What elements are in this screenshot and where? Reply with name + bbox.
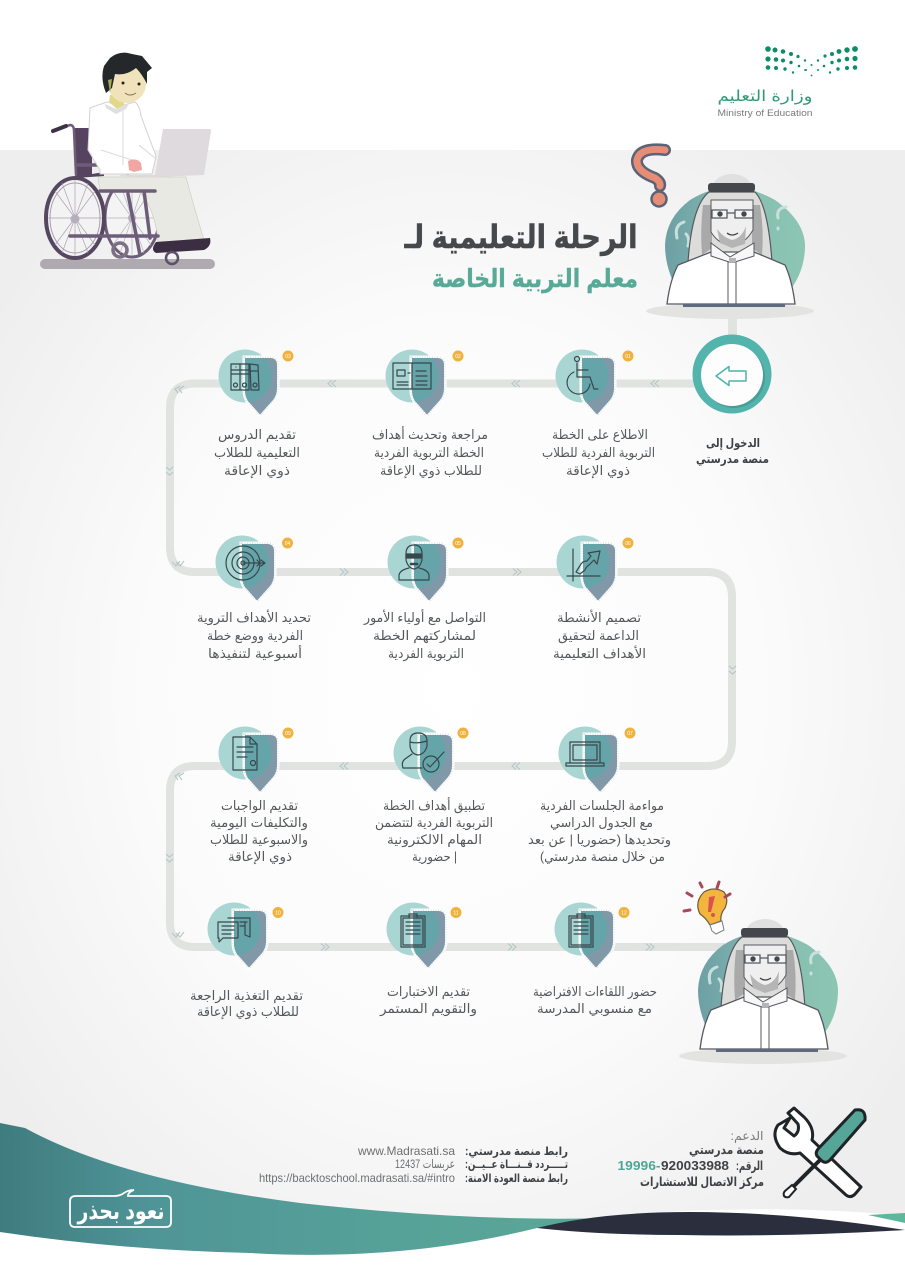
text 11: تقديم الاختبارات (387, 984, 470, 1000)
text 11: والتقويم المستمر (379, 1001, 477, 1017)
text 02: مراجعة وتحديث أهداف (372, 426, 488, 443)
text 04: الفردية ووضع خطة (207, 628, 303, 644)
marker and clipboard icon (554, 902, 613, 967)
text 12 (533, 984, 657, 1017)
badge 02: 02 (455, 354, 461, 360)
marker and person check icon (394, 726, 452, 791)
marker and chat icon (208, 902, 266, 967)
badge 10: 10 (275, 910, 281, 916)
link values: عربسات 12437 (395, 1157, 455, 1172)
step 09 (210, 726, 308, 865)
text 08: | حضورية (412, 849, 457, 865)
text 07: من خلال منصة مدرستي) (540, 849, 665, 865)
link labels: رابط منصة العودة الامنة: (465, 1173, 568, 1186)
step 10 (190, 902, 303, 1020)
marker and target icon (216, 536, 274, 600)
tools icon (775, 1108, 865, 1197)
phone number: 920033988 (661, 1159, 729, 1173)
badge 07 (624, 728, 636, 738)
illustration: teacher with question mark (637, 149, 814, 319)
text 06: الداعمة لتحقيق (558, 628, 639, 644)
link labels: تـــــردد قــنـــاة عــيــن: (465, 1159, 568, 1171)
wrench (775, 1108, 861, 1197)
marker and parent icon (388, 536, 446, 600)
platform name: منصة مدرستي (689, 1143, 764, 1157)
text 01: ذوي الإعاقة (566, 463, 630, 479)
support label: الدعم: (730, 1129, 764, 1143)
marker and book icon (386, 350, 444, 414)
text 01: الاطلاع على الخطة (552, 427, 648, 443)
marker and growth chart icon (556, 536, 615, 600)
text 09: تقديم الواجبات (221, 798, 298, 814)
marker and clipboard icon (386, 902, 445, 967)
text 02: الخطة التربوية الفردية (374, 445, 484, 461)
text 08: المهام الالكترونية (387, 832, 482, 848)
step 06 (553, 536, 646, 661)
logo dots (765, 46, 858, 76)
footer swoosh: teal wave (0, 1123, 610, 1255)
screwdriver (816, 1110, 865, 1162)
marker and wheelchair icon (556, 350, 614, 414)
timeline path (170, 384, 732, 947)
step 01 (542, 350, 655, 479)
light bulb (684, 882, 730, 934)
text 07: مواءمة الجلسات الفردية (540, 798, 664, 814)
face (108, 65, 146, 103)
badge 04: 04 (285, 541, 290, 547)
title line one: الرحلة التعليمية لـ (404, 219, 638, 256)
text 09: ذوي الإعاقة (228, 849, 292, 865)
title line two: معلم التربية الخاصة (432, 265, 638, 294)
frame (70, 165, 158, 255)
text 05: التواصل مع أولياء الأمور (363, 609, 486, 626)
backrest and handle (73, 128, 104, 178)
badge 03: 03 (285, 354, 291, 360)
campaign logo (70, 1190, 171, 1227)
text 06: الأهداف التعليمية (553, 645, 646, 661)
text 12: حضور اللقاءات الافتراضية (533, 984, 657, 1000)
start label: الدخول إلى (706, 436, 760, 451)
marker and laptop icon (558, 726, 617, 791)
path direction chevrons (166, 380, 736, 950)
text 02 (372, 426, 488, 479)
link values: www.Madrasati.sa (357, 1144, 455, 1158)
marker and binders icon (218, 350, 277, 414)
text 07 (528, 798, 671, 865)
text 04: تحديد الأهداف التروية (197, 609, 311, 626)
marker and document icon (218, 726, 277, 791)
trousers (98, 177, 204, 242)
heading (404, 219, 638, 294)
link labels: رابط منصة مدرستي: (465, 1146, 568, 1158)
text 04: أسبوعية لتنفيذها (208, 645, 302, 662)
consulting center: مركز الاتصال للاستشارات (640, 1175, 764, 1189)
badge 09: 09 (285, 731, 291, 737)
footrest (153, 238, 210, 253)
text 08: تطبيق أهداف الخطة (383, 797, 485, 814)
campaign logo: نعود بحذر (77, 1198, 164, 1225)
step 05 (363, 536, 486, 662)
text 04 (197, 609, 311, 662)
link labels (465, 1146, 568, 1186)
text 07: مع الجدول الدراسي (550, 815, 653, 831)
text 12: مع منسوبي المدرسة (537, 1001, 652, 1017)
phone label: الرقم: (736, 1159, 763, 1173)
ministry of education logo (718, 46, 858, 118)
text 01: التربوية الفردية للطلاب (542, 445, 655, 461)
connector from teacher to start (728, 318, 737, 342)
footer swoosh: dark wave (537, 1212, 905, 1235)
support contact (618, 1129, 764, 1189)
logo arabic name: وزارة التعليم (718, 88, 812, 105)
step 12 (533, 902, 657, 1017)
step 03 (214, 350, 300, 479)
text 10 (190, 988, 303, 1020)
text 03: ذوي الإعاقة (224, 463, 290, 479)
illustration: teacher with light bulb (679, 882, 847, 1064)
text 10: تقديم التغذية الراجعة (190, 988, 303, 1004)
step 02 (372, 350, 488, 479)
start label (696, 436, 769, 466)
text 08: التربوية الفردية لتتضمن (375, 815, 493, 831)
text 11 (379, 984, 477, 1017)
link values (259, 1144, 455, 1185)
hand (128, 159, 142, 172)
torso and arms (88, 102, 156, 174)
text 06: تصميم الأنشطة (557, 609, 641, 626)
badge 06: 06 (625, 541, 631, 547)
step 04 (197, 536, 311, 662)
badge 11: 11 (453, 910, 459, 916)
footer swoosh: right teal accent (868, 1213, 905, 1223)
text 05 (363, 609, 486, 662)
start label: منصة مدرستي (696, 452, 769, 466)
start node: enter Madrasati platform (692, 334, 772, 466)
hair (102, 53, 152, 93)
badge 12: 12 (621, 910, 627, 916)
laptop (120, 129, 211, 177)
start button (692, 334, 772, 414)
text 07: وتحديدها (حضوريا | عن بعد (528, 832, 671, 848)
hotline number: 19996- (618, 1159, 660, 1173)
text 05: التربوية الفردية (388, 646, 464, 662)
text 09: والاسبوعية للطلاب (210, 832, 308, 848)
wheels (46, 178, 159, 258)
text 09: والتكليفات اليومية (210, 815, 308, 831)
badge 05: 05 (455, 541, 461, 547)
badge 08: 08 (460, 731, 466, 737)
text 06 (553, 609, 646, 661)
step 08 (375, 726, 493, 865)
text 08 (375, 797, 493, 865)
step 07 (528, 726, 671, 865)
link values: https://backtoschool.madrasati.sa/#intro (259, 1171, 455, 1185)
text 02: للطلاب ذوي الإعاقة (380, 463, 482, 479)
text 09 (210, 798, 308, 865)
logo english name: Ministry of Education (718, 108, 812, 118)
step 11 (379, 902, 477, 1017)
badge 01: 01 (625, 354, 631, 360)
text 03 (214, 427, 300, 479)
platform links (259, 1144, 568, 1186)
text 03: تقديم الدروس (218, 427, 296, 443)
text 05: لمشاركتهم الخطة (373, 628, 476, 644)
badge 07: 07 (627, 731, 633, 737)
text 03: التعليمية للطلاب (214, 445, 300, 460)
text 10: للطلاب ذوي الإعاقة (197, 1004, 299, 1020)
text 01 (542, 427, 655, 479)
neck (109, 95, 125, 109)
question mark (637, 149, 665, 186)
illustration: student in wheelchair (40, 53, 215, 269)
